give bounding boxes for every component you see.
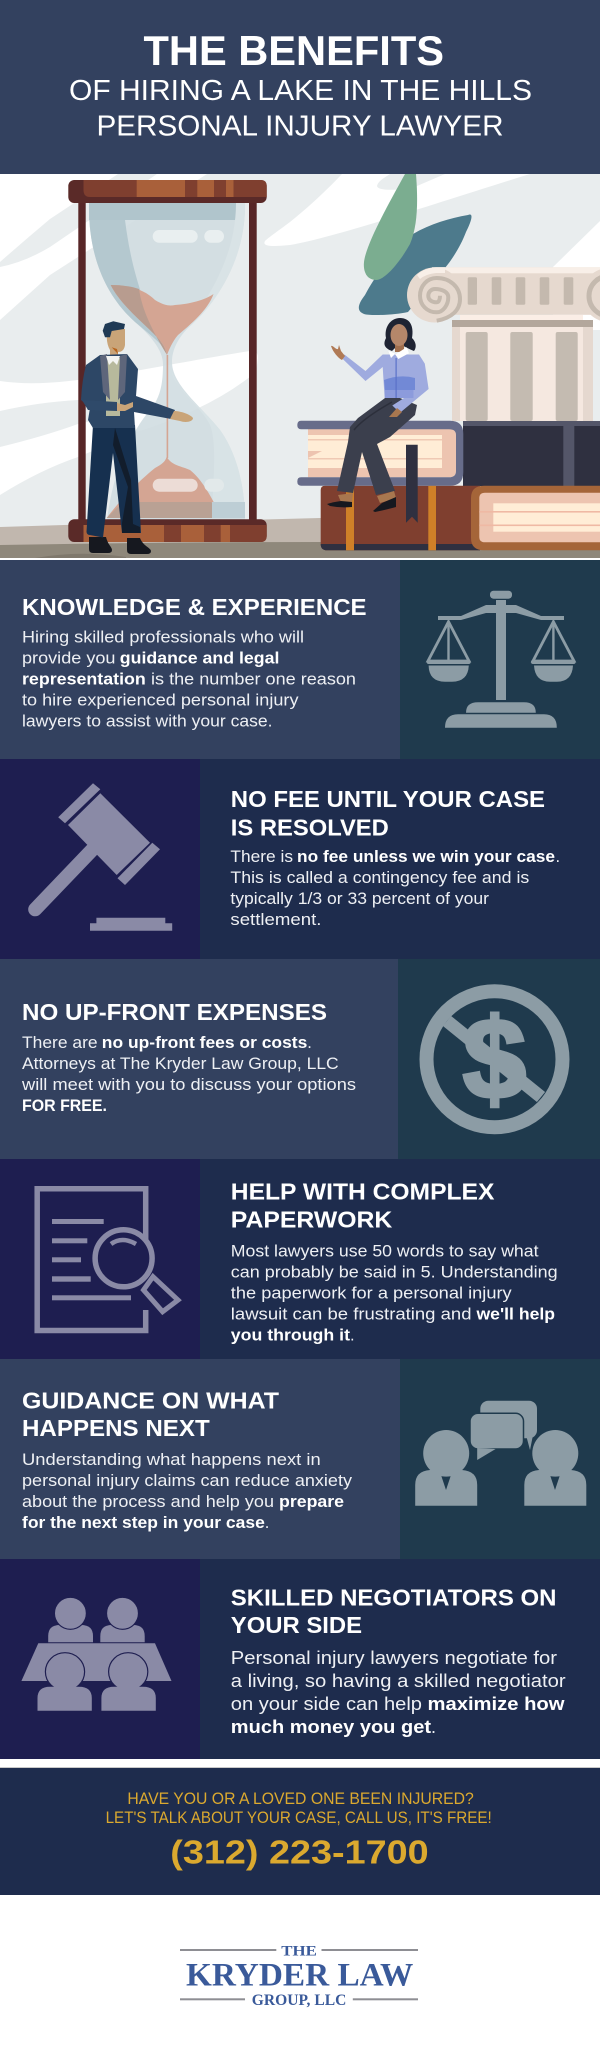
body text: to hire experienced personal injury xyxy=(22,692,299,710)
heading xyxy=(231,1585,557,1638)
title: PERSONAL INJURY LAWYER xyxy=(96,111,504,143)
call to action text: HAVE YOU OR A LOVED ONE BEEN INJURED? xyxy=(127,1790,474,1808)
heading: GUIDANCE ON WHAT xyxy=(22,1388,279,1414)
call to action text: LET'S TALK ABOUT YOUR CASE, CALL US, IT'S FREE! xyxy=(106,1809,492,1827)
panel: no fee until your case is resolved xyxy=(0,759,600,959)
heading: IS RESOLVED xyxy=(231,814,389,840)
hourglass top cap xyxy=(68,180,267,203)
woman sitting on books xyxy=(327,318,429,512)
body text: There are xyxy=(22,1034,98,1052)
man in suit xyxy=(81,321,193,554)
body text: is the number one reason xyxy=(151,670,356,688)
heading: KNOWLEDGE & EXPERIENCE xyxy=(22,594,367,620)
body text: . xyxy=(556,848,560,866)
logo: The Kryder Law Group, LLC: KRYDER LAW xyxy=(186,1958,413,1994)
body text: . xyxy=(307,1034,312,1052)
heading xyxy=(22,1388,279,1441)
body text: no up-front fees or costs xyxy=(102,1034,307,1052)
body text: prepare xyxy=(279,1493,344,1511)
body text: maximize how xyxy=(428,1694,566,1714)
body text: Attorneys at The Kryder Law Group, LLC xyxy=(22,1055,339,1073)
body text: much money you get xyxy=(231,1717,431,1737)
body text xyxy=(230,848,560,929)
body text: no fee unless we win your case xyxy=(297,848,555,866)
body text: lawsuit can be frustrating and xyxy=(231,1306,472,1324)
icon: negotiators around a table xyxy=(21,1597,172,1711)
body text: There is xyxy=(230,848,293,866)
body text: Personal injury lawyers negotiate for xyxy=(231,1648,557,1668)
icon: crossed-out dollar sign xyxy=(426,991,562,1127)
illustration: hourglass, lawyers, books and column xyxy=(0,174,600,560)
body text: This is called a contingency fee and is xyxy=(230,869,529,887)
body text: a living, so having a skilled negotiator xyxy=(231,1671,566,1691)
body text: settlement. xyxy=(230,911,322,929)
title xyxy=(69,27,532,143)
body text: FOR FREE. xyxy=(22,1097,107,1115)
body text xyxy=(22,1451,353,1532)
body text: lawyers to assist with your case. xyxy=(22,712,272,730)
icon: scales of justice xyxy=(427,591,576,728)
body text: personal injury claims can reduce anxiety xyxy=(22,1472,353,1490)
body text: you through it xyxy=(231,1327,351,1345)
heading: HELP WITH COMPLEX xyxy=(231,1179,495,1205)
body text xyxy=(22,628,356,730)
panel: guidance on what happens next xyxy=(0,1359,600,1559)
hourglass xyxy=(68,180,267,542)
body text: guidance and legal xyxy=(120,650,279,668)
panel: skilled negotiators on your side xyxy=(0,1559,600,1759)
heading: NO FEE UNTIL YOUR CASE xyxy=(231,786,545,812)
logo: The Kryder Law Group, LLC: THE xyxy=(281,1943,317,1959)
body text: on your side can help xyxy=(231,1694,422,1714)
leaves xyxy=(359,174,472,315)
body text: will meet with you to discuss your options xyxy=(21,1076,356,1094)
body text: representation xyxy=(22,670,146,688)
heading xyxy=(231,1179,495,1233)
ground xyxy=(0,518,600,560)
heading: NO UP-FRONT EXPENSES xyxy=(22,999,327,1025)
icon: crossed-out dollar sign: $ xyxy=(463,996,526,1123)
body text: Most lawyers use 50 words to say what xyxy=(231,1243,539,1261)
body text: can probably be said in 5. Understanding xyxy=(231,1264,558,1282)
body text: we'll help xyxy=(475,1306,555,1324)
body text: . xyxy=(265,1514,269,1532)
panel: no up-front expenses xyxy=(0,959,600,1159)
icon: two people talking xyxy=(415,1401,586,1506)
heading: HAPPENS NEXT xyxy=(22,1415,210,1441)
column xyxy=(407,267,600,421)
panel: knowledge and experience xyxy=(0,560,600,759)
panel: header xyxy=(0,0,600,174)
body text: Understanding what happens next in xyxy=(22,1451,321,1469)
icon: gavel xyxy=(35,783,172,931)
heading xyxy=(231,786,545,840)
body text: . xyxy=(350,1327,355,1345)
body text: . xyxy=(431,1717,436,1737)
body text xyxy=(231,1243,558,1345)
body text: the paperwork for a personal injury xyxy=(231,1285,513,1303)
body text xyxy=(21,1034,356,1115)
phone number: (312) 223-1700 xyxy=(170,1833,429,1870)
body text: Hiring skilled professionals who will xyxy=(22,628,304,646)
books xyxy=(297,421,600,550)
body text: provide you xyxy=(22,650,116,668)
panel: call to action xyxy=(0,1767,600,1895)
body text: typically 1/3 or 33 percent of your xyxy=(230,890,490,908)
call to action text xyxy=(106,1790,492,1827)
icon: document with magnifying glass xyxy=(37,1189,178,1330)
panel: help with complex paperwork xyxy=(0,1159,600,1359)
title: OF HIRING A LAKE IN THE HILLS xyxy=(69,75,532,107)
logo: The Kryder Law Group, LLC xyxy=(180,1943,418,2009)
heading: PAPERWORK xyxy=(231,1207,393,1233)
hourglass bottom cap xyxy=(68,519,267,542)
title: THE BENEFITS xyxy=(144,27,444,74)
body text xyxy=(231,1648,566,1737)
heading: SKILLED NEGOTIATORS ON xyxy=(231,1585,557,1611)
heading: YOUR SIDE xyxy=(231,1612,362,1638)
body text: about the process and help you xyxy=(22,1493,274,1511)
body text: for the next step in your case xyxy=(22,1514,265,1532)
logo: The Kryder Law Group, LLC: GROUP, LLC xyxy=(252,1992,346,2009)
